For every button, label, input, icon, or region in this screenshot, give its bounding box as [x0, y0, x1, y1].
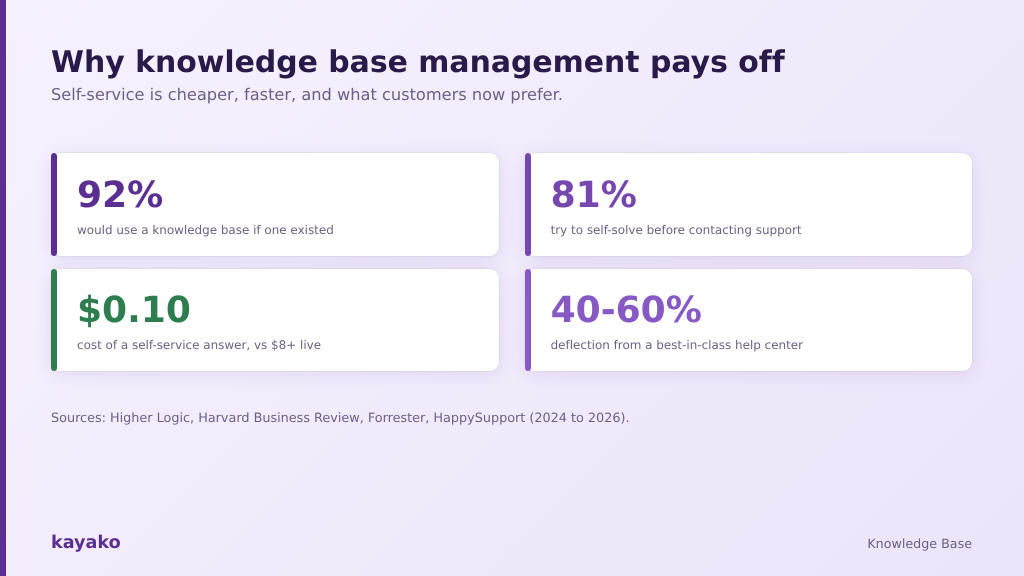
panel: 81% stat — [525, 153, 972, 256]
title: Why knowledge base management pays off — [51, 45, 785, 80]
panel: 40-60% stat: 40-60% — [551, 290, 702, 330]
sources note: Sources: Higher Logic, Harvard Business Review, Forrester, HappySupport (2024 to 2026). — [51, 410, 630, 426]
panel: 40-60% stat — [525, 268, 972, 371]
panel: 92% stat: 92% — [77, 175, 163, 216]
left accent bar — [0, 0, 6, 576]
panel: $0.10 stat: cost of a self-service answer, vs $8+ live — [77, 338, 321, 352]
subtitle: Self-service is cheaper, faster, and what customers now prefer. — [51, 85, 563, 104]
brand logo text: kayako — [51, 533, 121, 553]
panel: 92% stat — [51, 153, 498, 256]
panel: $0.10 stat: $0.10 — [77, 290, 191, 330]
panel: 81% stat: try to self-solve before contacting support — [551, 222, 802, 236]
footer label: Knowledge Base — [867, 536, 972, 550]
panel: 92% stat: would use a knowledge base if one existed — [77, 222, 334, 236]
panel: $0.10 stat — [51, 268, 498, 371]
panel: 40-60% stat: deflection from a best-in-class help center — [551, 338, 803, 352]
panel: 81% stat: 81% — [551, 175, 637, 216]
